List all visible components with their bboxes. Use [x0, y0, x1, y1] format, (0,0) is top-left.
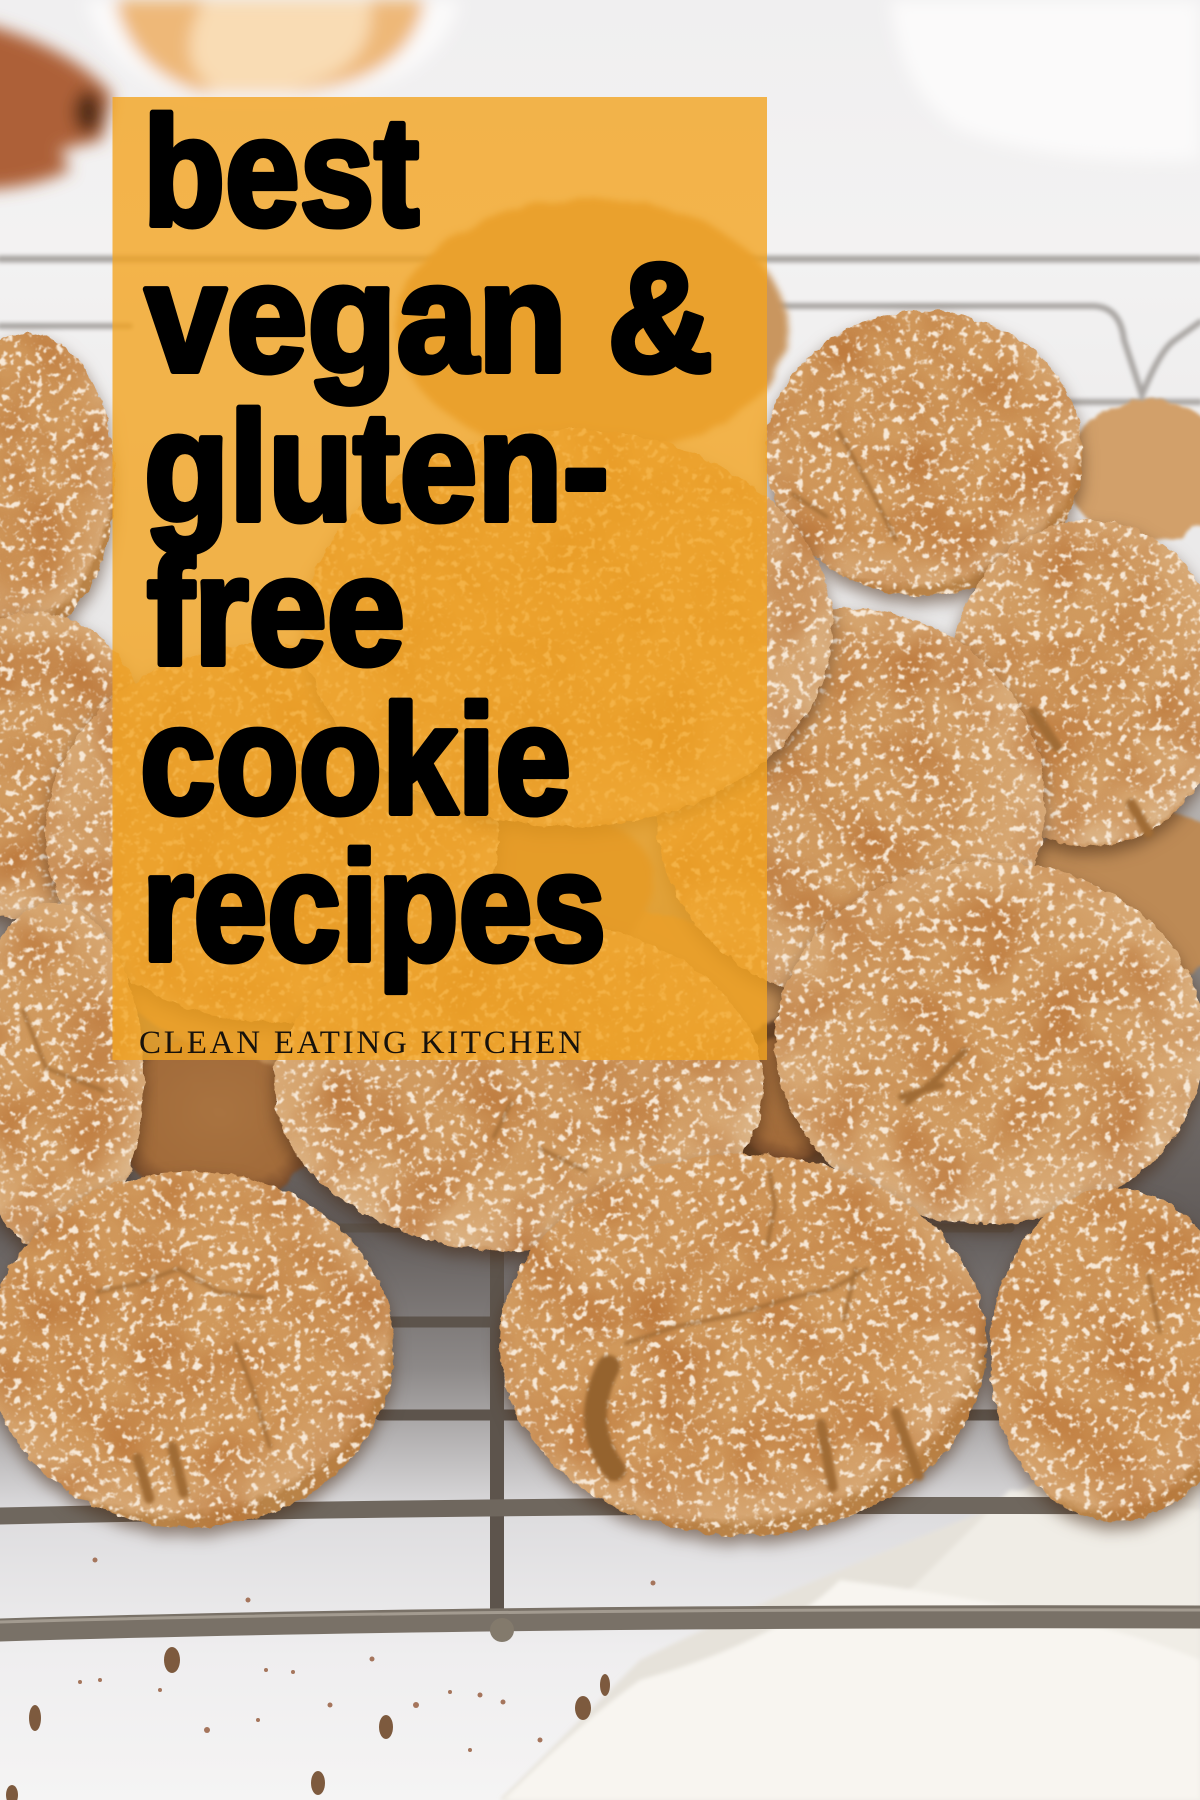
cooling rack wires: [0, 259, 1200, 1642]
bowl of ginger: [85, 0, 460, 98]
headline line: gluten-: gluten-: [144, 380, 609, 553]
stack of cookies: [0, 199, 1200, 1535]
cookie: front right: [990, 1188, 1200, 1521]
headline line: vegan &: vegan &: [145, 231, 713, 404]
headline: [140, 85, 713, 993]
headline line: best: best: [143, 85, 419, 258]
blurred back wires: [0, 259, 1200, 402]
back cookies: [0, 199, 1200, 1206]
cinnamon sticks: [0, 20, 112, 190]
translucent orange title panel: [112, 97, 767, 1060]
cookie: centre right: [655, 609, 1045, 999]
headline line: cookie: cookie: [140, 673, 571, 846]
cookie crumbs: [6, 1558, 656, 1800]
white mug: [890, 0, 1200, 161]
cookie: left lower: [0, 903, 144, 1252]
cookie: right middle: [948, 520, 1200, 846]
cookie: left middle: [0, 612, 155, 922]
cookie cracks: [23, 431, 1160, 1499]
front wires: [0, 1228, 1040, 1630]
linen napkin: [500, 1420, 1200, 1800]
headline line: free: free: [147, 524, 405, 697]
cookie: front centre: [500, 1154, 986, 1535]
cookie: top centre: [304, 429, 833, 827]
blurred props at the top: [0, 0, 1200, 190]
cookie: front left: [0, 1171, 394, 1527]
dark shadow mass between cookies: [138, 1011, 850, 1229]
headline line: recipes: recipes: [142, 820, 606, 993]
cookie: upper right: [766, 311, 1083, 596]
cookie: panel lower left: [46, 643, 498, 1022]
cookie: lower centre: [274, 919, 764, 1252]
cookie: right lower: [775, 861, 1200, 1224]
brand name: CLEAN EATING KITCHEN: [139, 1025, 582, 1061]
